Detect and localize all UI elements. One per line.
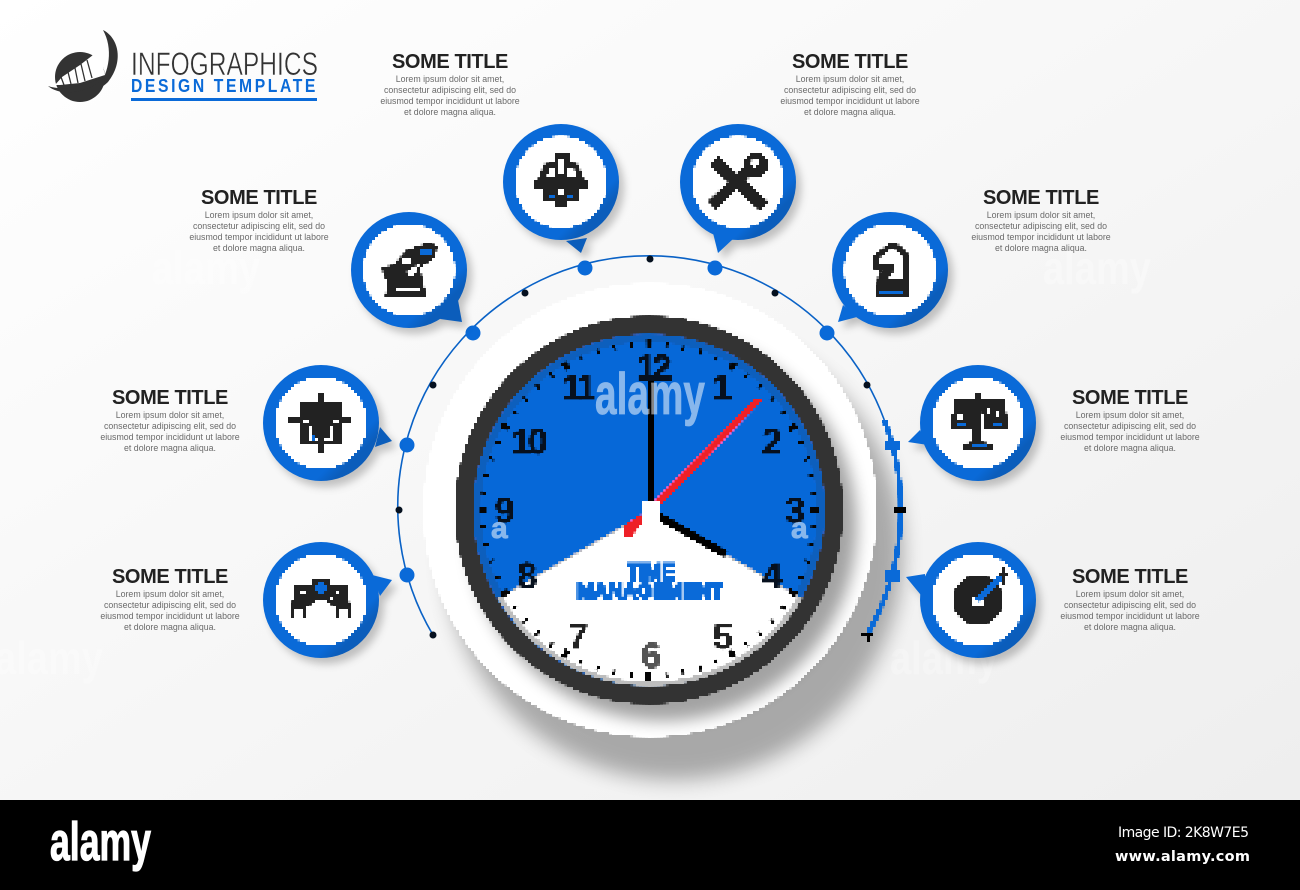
logo subtitle: DESIGN TEMPLATE [131, 76, 318, 96]
clock numbers: 12 [636, 347, 671, 388]
clock numbers [495, 347, 805, 676]
clock numbers: 10 [512, 421, 547, 462]
minute ticks [483, 344, 815, 676]
clock caption: MANAGEMENT [577, 580, 723, 603]
logo icon [48, 30, 118, 102]
icon: helmet [535, 153, 587, 208]
text block 2: et dolore magna aliqua. [804, 107, 896, 117]
icon: target [953, 568, 1009, 625]
white circle [363, 224, 455, 316]
white circle [515, 136, 607, 228]
text block 6: SOME TITLE [1072, 387, 1188, 409]
minute hand [647, 380, 654, 510]
text block 1 [380, 51, 520, 117]
background watermarks: alamy [890, 632, 998, 684]
text block 1: eiusmod tempor incididunt ut labore [380, 96, 520, 106]
text block 3: SOME TITLE [201, 187, 317, 209]
text block 7: et dolore magna aliqua. [124, 622, 216, 632]
clock numbers: 6 [641, 635, 661, 676]
white circle [275, 554, 367, 646]
white circle [932, 554, 1024, 646]
clock numbers: 5 [713, 616, 733, 657]
clock shadow [469, 333, 857, 721]
clock watermark: alamy [595, 362, 705, 427]
text block 7: eiusmod tempor incididunt ut labore [100, 611, 240, 621]
clock watermark: a [491, 512, 508, 545]
clock face outer band [473, 334, 825, 686]
clock numbers: 9 [495, 490, 515, 531]
text block 7: consectetur adipiscing elit, sed do [104, 600, 236, 610]
bubble: spider [263, 542, 392, 658]
hour ticks [483, 344, 815, 676]
white circle [692, 136, 784, 228]
clock caption: TIME [627, 559, 675, 586]
white disc shadow [445, 322, 903, 780]
text block 8 [1060, 566, 1200, 632]
clock caption [577, 559, 723, 603]
text block 2: SOME TITLE [792, 51, 908, 73]
footer bar [0, 800, 1300, 890]
clock numbers: 11 [562, 367, 596, 408]
text block 2 [780, 51, 920, 117]
second hand [651, 400, 763, 510]
text block 1: Lorem ipsum dolor sit amet, [396, 74, 504, 84]
text block 3 [189, 187, 329, 253]
text block 8: eiusmod tempor incididunt ut labore [1060, 611, 1200, 621]
text block 5: et dolore magna aliqua. [124, 443, 216, 453]
text block 2: Lorem ipsum dolor sit amet, [796, 74, 904, 84]
text block 6 [1060, 387, 1200, 453]
background watermarks: alamy [1043, 242, 1151, 294]
text block 3: et dolore magna aliqua. [213, 243, 305, 253]
clock numbers: 7 [568, 616, 588, 657]
timeline right pixelated segment [862, 420, 906, 641]
clock numbers: 1 [712, 367, 732, 408]
clock rim [455, 316, 843, 704]
logo underline [131, 98, 317, 101]
text block 4: consectetur adipiscing elit, sed do [975, 221, 1107, 231]
text block 5: Lorem ipsum dolor sit amet, [116, 410, 224, 420]
icon: telescope [382, 242, 437, 297]
white circle [932, 377, 1024, 469]
clock face white sector [498, 510, 802, 686]
logo [48, 30, 318, 102]
text block 6: consectetur adipiscing elit, sed do [1064, 421, 1196, 431]
clock numbers: 8 [517, 555, 537, 596]
icon: tools [712, 153, 768, 206]
text block 5: consectetur adipiscing elit, sed do [104, 421, 236, 431]
clock centre [641, 501, 661, 522]
bubble: helmet [503, 124, 619, 253]
bubble: bug [263, 365, 392, 481]
icon: knight [873, 242, 910, 297]
background watermarks: alamy [152, 242, 260, 294]
icon: scales [950, 393, 1008, 450]
white circle [275, 377, 367, 469]
clock [455, 316, 843, 704]
text block 3: eiusmod tempor incididunt ut labore [189, 232, 329, 242]
text block 4: Lorem ipsum dolor sit amet, [987, 210, 1095, 220]
clock face white sector inner [503, 512, 797, 682]
text block 7: SOME TITLE [112, 566, 228, 588]
text block 6: eiusmod tempor incididunt ut labore [1060, 432, 1200, 442]
bubble: telescope [351, 212, 467, 328]
text block 4: SOME TITLE [983, 187, 1099, 209]
clock watermark [491, 362, 808, 545]
text block 8: SOME TITLE [1072, 566, 1188, 588]
text block 1: consectetur adipiscing elit, sed do [384, 85, 516, 95]
logo title: INFOGRAPHICS [131, 46, 318, 82]
text block 4: et dolore magna aliqua. [995, 243, 1087, 253]
text block 1: et dolore magna aliqua. [404, 107, 496, 117]
timeline left and top nodes [396, 256, 870, 638]
image id: Image ID: 2K8W7E5 [1118, 825, 1249, 841]
icon: spider [290, 579, 352, 617]
white circle [844, 224, 936, 316]
clock watermark: a [791, 512, 808, 545]
timeline arc [396, 256, 884, 638]
background watermarks [0, 242, 1151, 684]
text block 2: eiusmod tempor incididunt ut labore [780, 96, 920, 106]
text block 2: consectetur adipiscing elit, sed do [784, 85, 916, 95]
text block 8: consectetur adipiscing elit, sed do [1064, 600, 1196, 610]
clock numbers: 3 [785, 490, 805, 531]
clock face blue [481, 342, 817, 678]
clock numbers: 4 [762, 555, 782, 596]
white disc [423, 283, 877, 737]
website: www.alamy.com [1115, 849, 1250, 865]
text block 3: Lorem ipsum dolor sit amet, [205, 210, 313, 220]
text block 4 [971, 187, 1111, 253]
text block 7 [100, 566, 240, 632]
clock numbers: 2 [762, 421, 782, 462]
footer logo: alamy [50, 812, 151, 872]
bubble: scales [908, 365, 1036, 481]
text block 7: Lorem ipsum dolor sit amet, [116, 589, 224, 599]
text block 8: et dolore magna aliqua. [1084, 622, 1176, 632]
text block 5: SOME TITLE [112, 387, 228, 409]
icon: bug [289, 393, 352, 452]
text block 6: et dolore magna aliqua. [1084, 443, 1176, 453]
text block 1: SOME TITLE [392, 51, 508, 73]
text block 4: eiusmod tempor incididunt ut labore [971, 232, 1111, 242]
text block 6: Lorem ipsum dolor sit amet, [1076, 410, 1184, 420]
hour hand [652, 510, 728, 558]
bubble: tools [680, 124, 796, 253]
text block 5: eiusmod tempor incididunt ut labore [100, 432, 240, 442]
second hand tail [623, 514, 642, 536]
text block 3: consectetur adipiscing elit, sed do [193, 221, 325, 231]
bubble: target [906, 542, 1036, 658]
bubble: knight [832, 212, 948, 328]
text block 8: Lorem ipsum dolor sit amet, [1076, 589, 1184, 599]
text block 5 [100, 387, 240, 453]
